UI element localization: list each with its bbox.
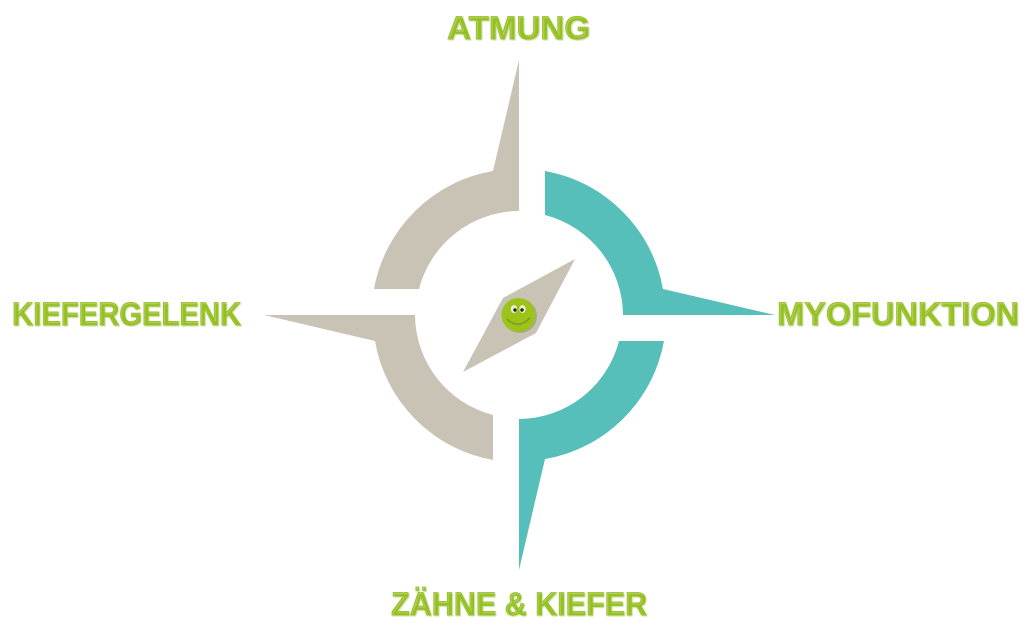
label: Zähne & Kiefer: ZÄHNE & KIEFER (391, 586, 647, 622)
label: Kiefergelenk: KIEFERGELENK (12, 296, 241, 332)
label: Myofunktion: MYOFUNKTION (777, 296, 1019, 332)
compass needle (463, 259, 575, 372)
compass arm: east (545, 171, 775, 315)
label: Atmung: ATMUNG (447, 10, 590, 46)
compass arm: north (374, 60, 519, 289)
icon: smiley (502, 298, 537, 333)
compass arm: south (519, 341, 664, 570)
compass arm: west (264, 315, 493, 460)
